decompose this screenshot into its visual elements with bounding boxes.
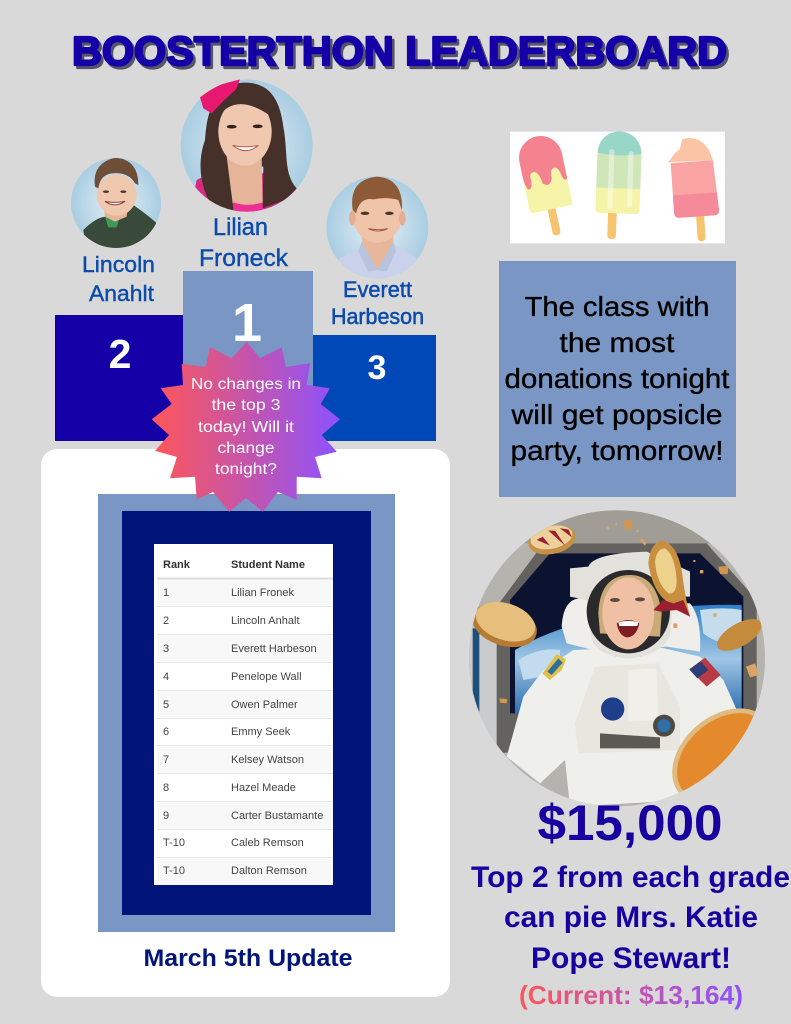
title: BOOSTERTHON LEADERBOARD: [72, 28, 727, 74]
image: astronaut with flying pies: [469, 510, 765, 806]
table: student rankings: Dalton Remson: [231, 865, 307, 877]
icon: pink bow: [200, 79, 240, 113]
name: Lincoln Anahlt: Anahlt: [89, 281, 154, 306]
panel: leaderboard card: [41, 449, 450, 997]
goal description: Pope Stewart!: [531, 942, 731, 975]
table: student rankings: Penelope Wall: [231, 671, 302, 683]
table: student rankings: [154, 544, 333, 885]
icon: pink and yellow popsicle: [515, 132, 578, 240]
table: student rankings: T-10: [163, 837, 185, 849]
table: student rankings: Rank: [163, 559, 191, 571]
goal description: Top 2 from each grade: [471, 861, 790, 894]
table: student rankings: Kelsey Watson: [231, 754, 304, 766]
callout: starburst: the top 3: [212, 397, 280, 414]
callout: starburst: No changes in: [191, 376, 301, 393]
podium: second place: 2: [109, 331, 131, 377]
panel: class popsicle party: will get popsicle: [510, 399, 722, 430]
table: student rankings: Carter Bustamante: [231, 810, 323, 822]
table: student rankings: Hazel Meade: [231, 782, 296, 794]
panel: class popsicle party: the most: [560, 327, 675, 358]
table: student rankings: 8: [163, 782, 169, 794]
table: student rankings: 3: [163, 643, 169, 655]
portrait: Everett: [326, 176, 428, 283]
table: student rankings: 7: [163, 754, 169, 766]
table: student rankings: Everett Harbeson: [231, 643, 317, 655]
title: BOOSTERTHON LEADERBOARD: [74, 31, 729, 77]
table: student rankings: Emmy Seek: [231, 726, 291, 738]
current total: (Current: $13,164): [519, 980, 743, 1010]
callout: starburst: tonight?: [215, 461, 277, 478]
panel: class popsicle party: [499, 261, 736, 497]
goal description: [471, 861, 790, 975]
image: popsicles: [510, 131, 725, 243]
goal description: can pie Mrs. Katie: [504, 901, 758, 934]
portrait: Lincoln: [71, 158, 161, 253]
podium: second place: [55, 315, 183, 441]
podium: first place: [183, 271, 313, 421]
name: Lilian Froneck: Froneck: [199, 245, 289, 272]
table: student rankings: 4: [163, 671, 169, 683]
icon: bitten popsicle: [667, 136, 721, 243]
table caption: March 5th Update: [144, 945, 352, 972]
table: student rankings: 6: [163, 726, 169, 738]
table: student rankings: Owen Palmer: [231, 699, 298, 711]
panel: class popsicle party: The class with: [524, 291, 710, 322]
table: student rankings: T-10: [163, 865, 185, 877]
podium: first place: 1: [232, 293, 262, 353]
suit: [507, 647, 738, 807]
panel: class popsicle party: donations tonight: [504, 363, 730, 394]
name: Lilian Froneck: Lilian: [213, 214, 268, 241]
callout: starburst: today! Will it: [198, 419, 295, 436]
table: student rankings: 5: [163, 699, 169, 711]
table: student rankings: Caleb Remson: [231, 837, 304, 849]
podium: third place: [313, 335, 436, 441]
pies: [648, 541, 690, 617]
icon: green popsicle: [594, 131, 642, 240]
table: student rankings: Lilian Fronek: [231, 587, 294, 599]
pumpkin pie: [672, 708, 755, 793]
callout: starburst: change: [218, 440, 274, 457]
portrait: Lilian: [181, 79, 313, 217]
table: student rankings: Student Name: [231, 559, 305, 571]
goal amount: $15,000: [538, 795, 722, 851]
table: student rankings: 9: [163, 810, 169, 822]
table: student rankings: Lincoln Anhalt: [231, 615, 300, 627]
name: Lincoln Anahlt: Lincoln: [82, 252, 155, 277]
name: Everett Harbeson: Everett: [343, 277, 412, 302]
table frame: [98, 494, 395, 932]
name: Everett Harbeson: Harbeson: [331, 304, 424, 329]
table: student rankings: 1: [163, 587, 169, 599]
panel: class popsicle party: party, tomorrow!: [510, 435, 724, 466]
callout: starburst: [152, 342, 340, 512]
helmet: [570, 552, 690, 658]
podium: third place: 3: [368, 349, 386, 387]
table: student rankings: 2: [163, 615, 169, 627]
